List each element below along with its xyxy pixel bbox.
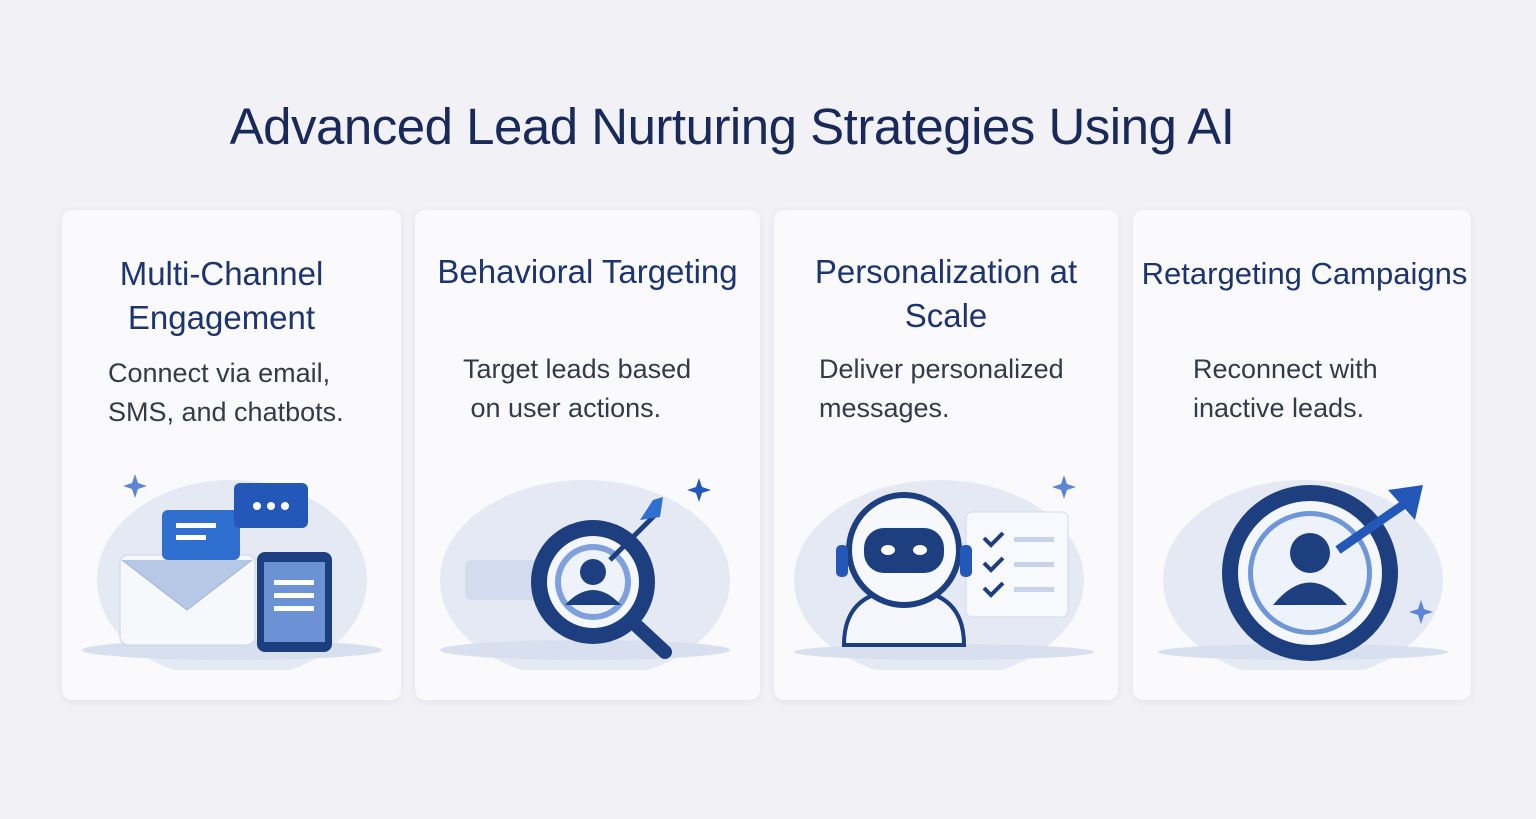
text: retargeting: inactive leads. — [1193, 393, 1364, 423]
icon: retarget — [1158, 480, 1448, 670]
heading: behavioral: Behavioral Targeting — [437, 253, 738, 290]
text: behavioral — [463, 354, 691, 423]
text: retargeting — [1193, 354, 1378, 423]
text: retargeting: Reconnect with — [1193, 354, 1378, 384]
heading: multi-channel: Engagement — [128, 299, 315, 336]
panel: retargeting — [1133, 210, 1471, 700]
text: multi-channel: Connect via email, — [108, 358, 330, 388]
text: multi-channel: SMS, and chatbots. — [108, 397, 344, 427]
icon: messages — [82, 474, 382, 670]
text: multi-channel — [108, 358, 344, 427]
text: personalization — [819, 354, 1064, 423]
heading: personalization: Personalization at — [815, 253, 1077, 290]
panel: multi-channel — [62, 210, 401, 700]
text: behavioral: on user actions. — [470, 393, 661, 423]
heading: personalization — [815, 253, 1077, 334]
text: personalization: Deliver personalized — [819, 354, 1064, 384]
panel: personalization — [774, 210, 1118, 700]
heading: personalization: Scale — [905, 297, 987, 334]
text: behavioral: Target leads based — [463, 354, 691, 384]
text: personalization: messages. — [819, 393, 950, 423]
heading: multi-channel — [120, 255, 323, 336]
panel: behavioral — [415, 210, 760, 700]
title: Advanced Lead Nurturing Strategies Using AI — [230, 98, 1234, 155]
icon: target search — [440, 478, 730, 670]
icon: robot checklist — [794, 475, 1094, 670]
heading: multi-channel: Multi-Channel — [120, 255, 323, 292]
heading: retargeting: Retargeting Campaigns — [1142, 256, 1467, 291]
